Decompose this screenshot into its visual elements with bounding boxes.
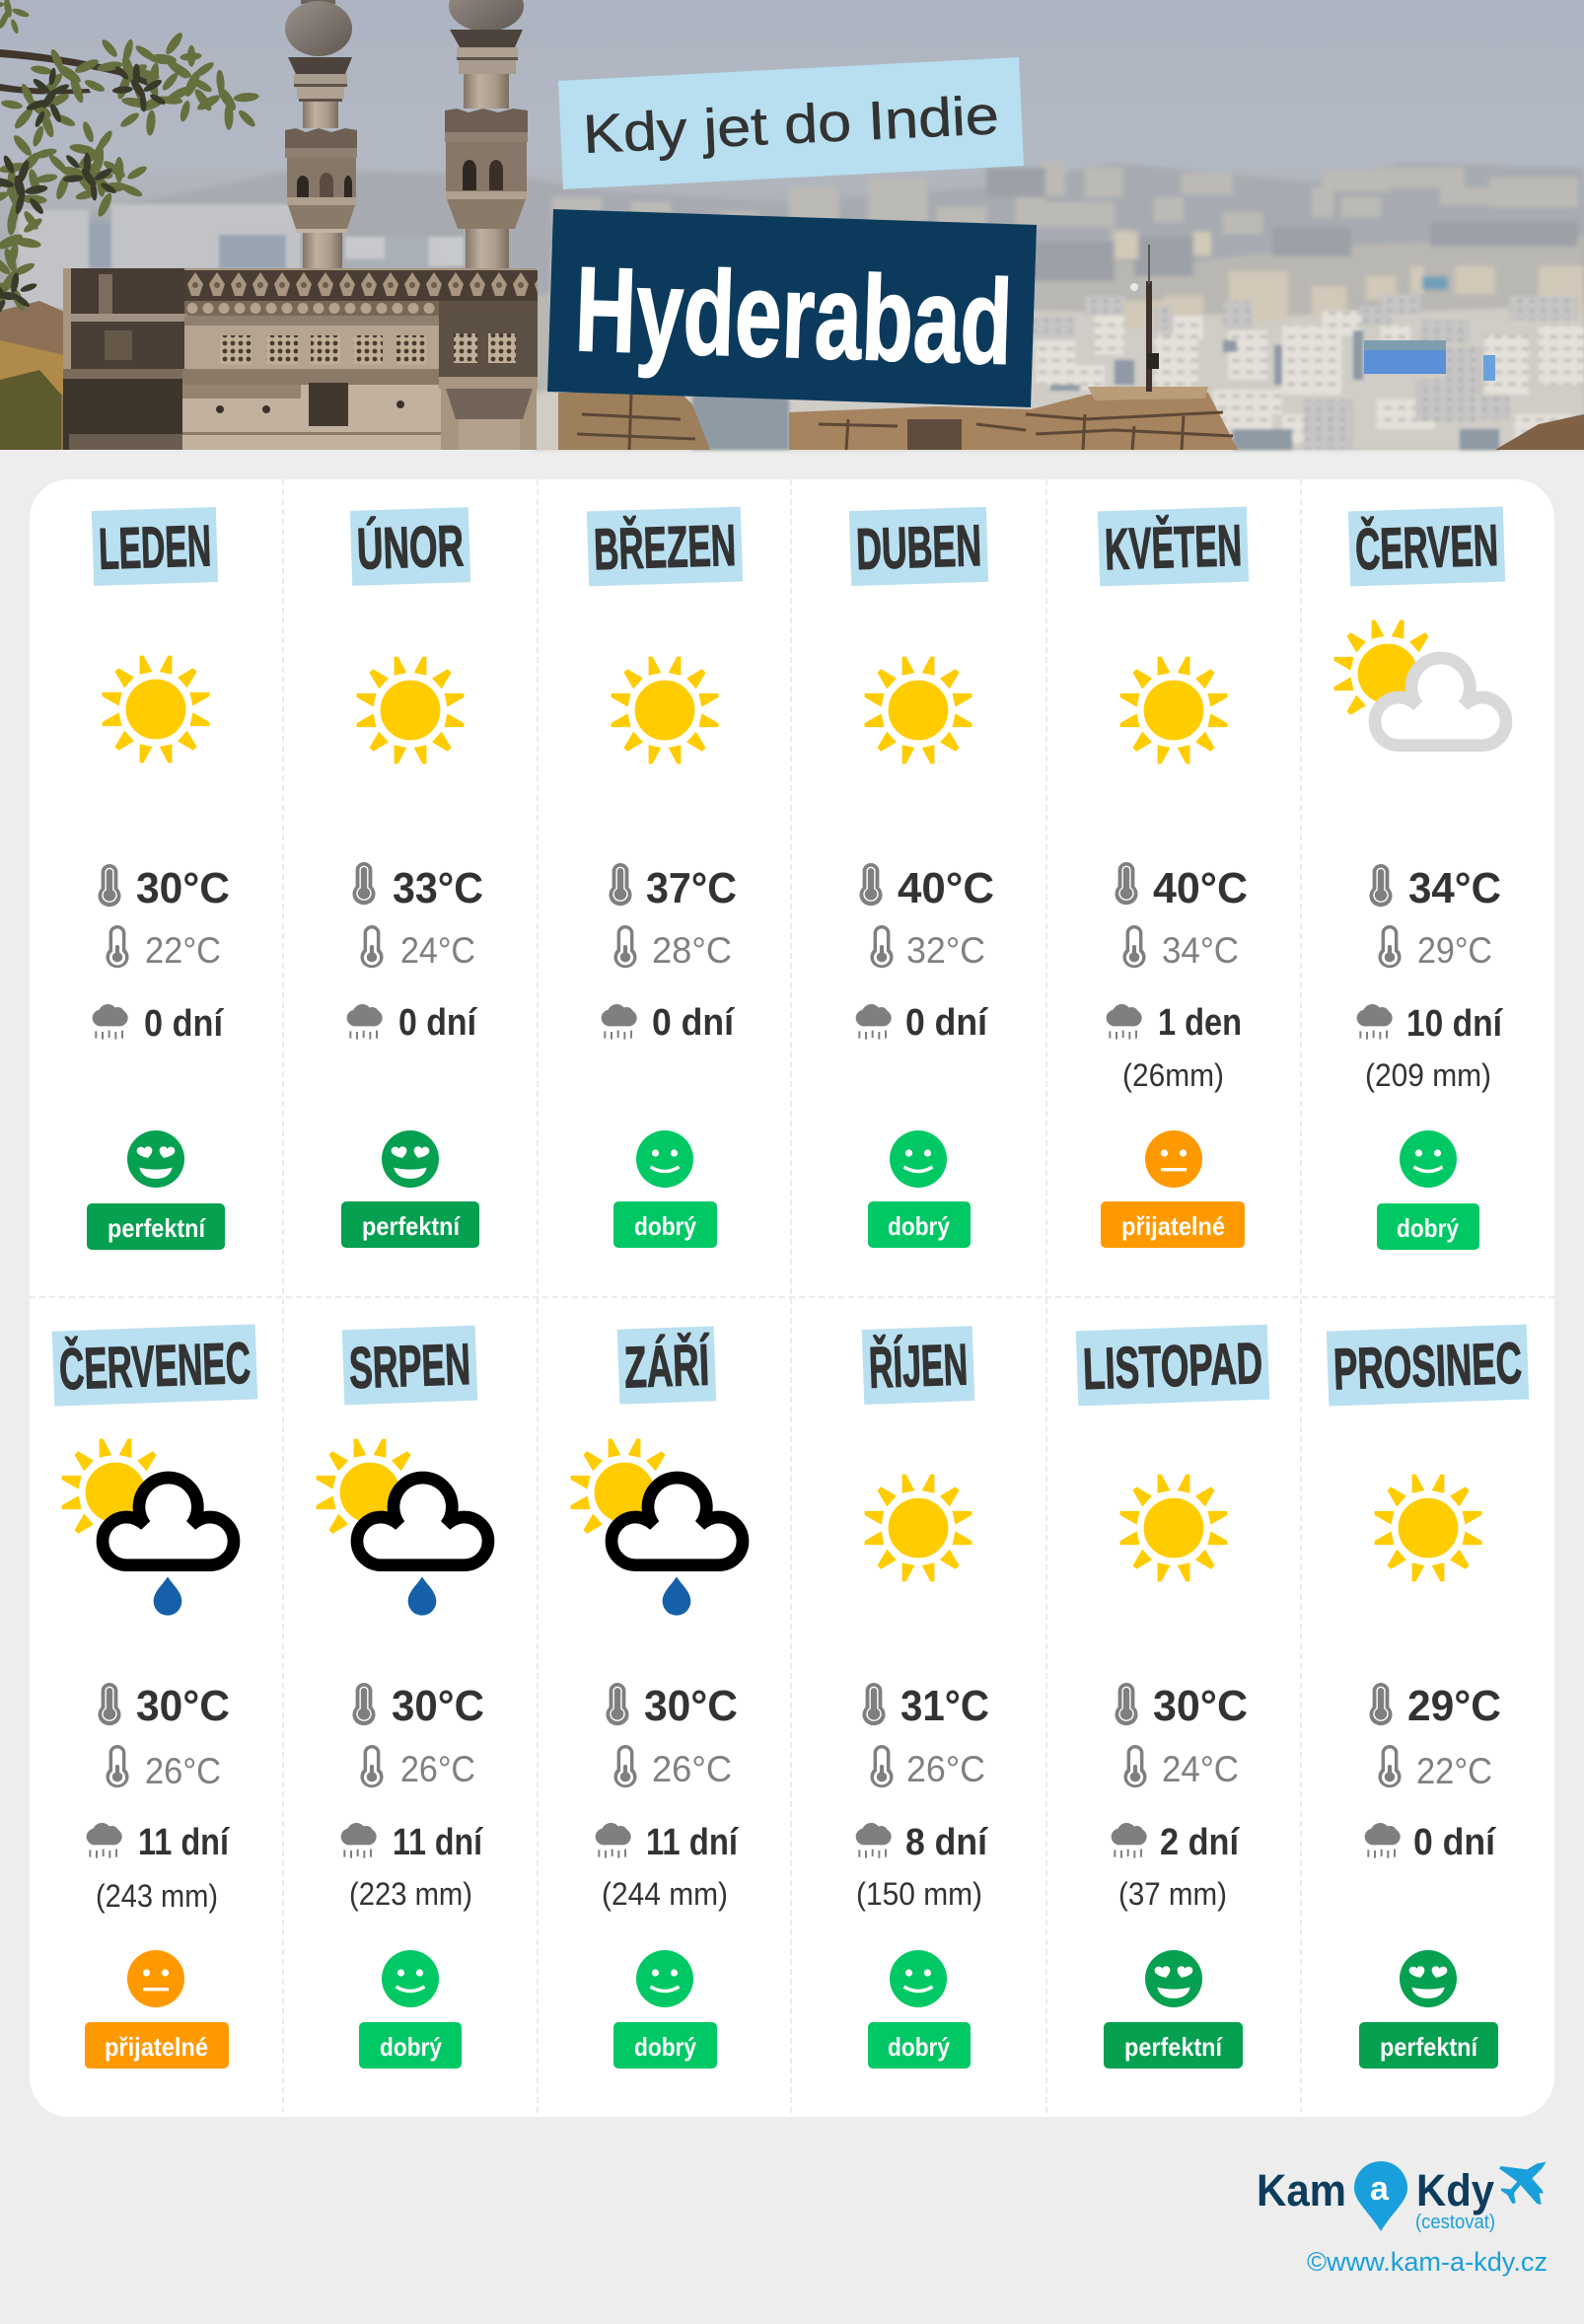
rating badge bbox=[1104, 2022, 1243, 2069]
icon: sun bbox=[103, 656, 209, 763]
month label: SRPEN bbox=[348, 1332, 471, 1401]
foreground city blocks bbox=[572, 294, 1584, 450]
icon: sun bbox=[1375, 1475, 1481, 1581]
min temperature: 26°C bbox=[906, 1749, 985, 1789]
rating badge bbox=[85, 2022, 229, 2069]
palace building bbox=[63, 268, 538, 450]
rain amount: (26mm) bbox=[1122, 1057, 1224, 1093]
icon: thermometer high bbox=[1369, 864, 1393, 907]
logo word Kam: Kam bbox=[1257, 2165, 1346, 2215]
icon: sun, black cloud and drop bbox=[571, 1439, 743, 1616]
smiley bbox=[127, 1130, 184, 1188]
month label: DUBEN bbox=[855, 513, 982, 582]
min temperature: 24°C bbox=[1162, 1749, 1239, 1789]
month label bbox=[1098, 507, 1249, 586]
icon: sun bbox=[1120, 1475, 1227, 1581]
icon: sun, black cloud and drop bbox=[62, 1439, 234, 1616]
month label: LISTOPAD bbox=[1082, 1331, 1263, 1402]
min temperature: 26°C bbox=[652, 1749, 732, 1789]
max temperature: 33°C bbox=[393, 864, 483, 912]
smiley bbox=[1400, 1950, 1457, 2007]
rain days: 0 dní bbox=[144, 1003, 224, 1045]
rain days: 11 dní bbox=[393, 1822, 483, 1863]
max temperature: 40°C bbox=[898, 864, 994, 912]
icon: rain bbox=[596, 1823, 631, 1858]
rating badge bbox=[1359, 2022, 1498, 2069]
cell: ZÁŘÍ bbox=[571, 1326, 743, 2069]
smiley bbox=[636, 1950, 693, 2007]
background high rises bbox=[18, 204, 464, 309]
rating badge bbox=[868, 2022, 971, 2069]
month label: ZÁŘÍ bbox=[623, 1331, 711, 1400]
icon: thermometer high bbox=[862, 1683, 886, 1725]
rain amount: (37 mm) bbox=[1118, 1876, 1227, 1912]
rating badge bbox=[87, 1203, 225, 1250]
title tag: Hyderabad bbox=[547, 209, 1037, 407]
rating badge: perfektní bbox=[362, 1211, 461, 1241]
icon: thermometer high bbox=[606, 1683, 629, 1725]
camera pole bbox=[1130, 245, 1159, 392]
icon: rain bbox=[87, 1823, 122, 1858]
rain days: 11 dní bbox=[646, 1822, 739, 1863]
icon: airplane bbox=[1499, 2162, 1547, 2205]
month label bbox=[849, 507, 988, 586]
max temperature: 31°C bbox=[900, 1682, 989, 1730]
min temperature: 22°C bbox=[1416, 1751, 1492, 1791]
smiley bbox=[636, 1130, 693, 1188]
month label: BŘEZEN bbox=[593, 512, 737, 582]
rating badge bbox=[359, 2022, 462, 2069]
icon: thermometer high bbox=[98, 864, 121, 907]
cell: LISTOPAD bbox=[1076, 1325, 1269, 2069]
min temperature: 26°C bbox=[400, 1749, 475, 1789]
min temperature: 29°C bbox=[1417, 930, 1492, 971]
icon: sun, black cloud and drop bbox=[317, 1439, 488, 1616]
icon: thermometer low bbox=[360, 1745, 384, 1787]
rain days: 2 dní bbox=[1160, 1822, 1240, 1863]
icon: thermometer high bbox=[352, 1683, 376, 1725]
rating badge bbox=[1101, 1201, 1245, 1248]
month label bbox=[862, 1326, 974, 1405]
cell: ČERVEN bbox=[1334, 507, 1506, 1250]
minaret 2 bbox=[445, 0, 528, 270]
rocks bbox=[558, 387, 1584, 450]
icon: rain bbox=[1107, 1004, 1142, 1040]
title tag: Kdy jet do Indie: Kdy jet do Indie bbox=[582, 84, 1000, 165]
rating badge bbox=[613, 1201, 717, 1248]
icon: map pin with letter a: a bbox=[1370, 2170, 1390, 2208]
max temperature: 30°C bbox=[644, 1682, 738, 1730]
smiley bbox=[127, 1950, 184, 2007]
rating badge: perfektní bbox=[108, 1213, 206, 1243]
rating badge: přijatelné bbox=[1121, 1211, 1225, 1241]
min temperature: 34°C bbox=[1162, 930, 1239, 971]
max temperature: 30°C bbox=[1153, 1682, 1248, 1730]
month label: LEDEN bbox=[98, 513, 212, 582]
min temperature: 24°C bbox=[400, 930, 475, 971]
icon: rain bbox=[1365, 1823, 1401, 1858]
rating badge bbox=[1377, 1203, 1479, 1250]
rating badge: dobrý bbox=[888, 1211, 950, 1241]
icon: thermometer low bbox=[1122, 925, 1146, 968]
max temperature: 34°C bbox=[1408, 864, 1501, 912]
icon: rain bbox=[93, 1004, 128, 1040]
icon: rain bbox=[602, 1004, 637, 1040]
max temperature: 40°C bbox=[1153, 864, 1248, 912]
icon: thermometer low bbox=[106, 925, 129, 968]
rating badge: dobrý bbox=[1397, 1213, 1459, 1243]
icon: map pin with letter a bbox=[1354, 2161, 1407, 2231]
month label bbox=[587, 507, 743, 586]
month label: ČERVENEC bbox=[58, 1330, 252, 1402]
left cliff bbox=[0, 301, 69, 450]
icon: sun behind grey cloud bbox=[1334, 620, 1506, 746]
parapet bbox=[184, 270, 538, 302]
title tag: Hyderabad: Hyderabad bbox=[573, 242, 1014, 390]
smiley bbox=[1400, 1130, 1457, 1188]
month label bbox=[92, 507, 218, 586]
min temperature: 22°C bbox=[145, 930, 221, 971]
max temperature: 37°C bbox=[646, 864, 737, 912]
icon: thermometer low bbox=[1378, 1745, 1402, 1787]
smiley bbox=[890, 1950, 947, 2007]
rating badge: dobrý bbox=[634, 2032, 696, 2062]
icon: thermometer low bbox=[1378, 925, 1402, 968]
icon: rain bbox=[1357, 1004, 1393, 1040]
rain amount: (243 mm) bbox=[96, 1878, 218, 1914]
hazy city hillside bbox=[89, 161, 1584, 450]
cell: DUBEN bbox=[849, 507, 994, 1248]
icon: thermometer low bbox=[1123, 1745, 1147, 1787]
rain days: 1 den bbox=[1158, 1002, 1242, 1044]
icon: thermometer high bbox=[1115, 1683, 1138, 1725]
max temperature: 30°C bbox=[392, 1682, 484, 1730]
icon: thermometer low bbox=[613, 1745, 637, 1787]
rain days: 0 dní bbox=[398, 1002, 477, 1044]
icon: thermometer high bbox=[98, 1683, 121, 1725]
rain days: 10 dní bbox=[1406, 1003, 1503, 1045]
min temperature: 32°C bbox=[906, 930, 985, 971]
rain amount: (223 mm) bbox=[349, 1876, 472, 1912]
month label bbox=[350, 507, 470, 586]
icon: sun bbox=[865, 657, 972, 763]
tree branches and leaves bbox=[0, 0, 270, 328]
rain days: 0 dní bbox=[652, 1002, 735, 1044]
month label bbox=[342, 1326, 477, 1405]
max temperature: 30°C bbox=[136, 864, 230, 912]
cell: ŘÍJEN bbox=[856, 1326, 989, 2069]
month label bbox=[617, 1326, 716, 1405]
icon: thermometer high bbox=[1369, 1683, 1393, 1725]
icon: thermometer high bbox=[609, 863, 632, 906]
logo: Kam a Kdy bbox=[1257, 2161, 1548, 2277]
cell: LEDEN bbox=[87, 507, 230, 1250]
rain days: 0 dní bbox=[1413, 1822, 1496, 1863]
title tag: Kdy jet do Indie bbox=[558, 57, 1024, 189]
panels bbox=[184, 316, 439, 326]
icon: thermometer high bbox=[1115, 862, 1138, 905]
month label: KVĚTEN bbox=[1104, 512, 1243, 582]
rating badge: dobrý bbox=[888, 2032, 950, 2062]
rating badge bbox=[613, 2022, 717, 2069]
month label bbox=[1076, 1325, 1269, 1406]
icon: rain bbox=[1112, 1823, 1147, 1858]
blue billboard bbox=[1364, 350, 1446, 374]
logo tagline: (cestovat) bbox=[1415, 2212, 1495, 2233]
tower 2 base bbox=[439, 316, 538, 377]
min temperature: 26°C bbox=[145, 1751, 221, 1791]
website credit: ©www.kam-a-kdy.cz bbox=[1307, 2247, 1548, 2277]
logo word Kdy: Kdy bbox=[1416, 2165, 1494, 2215]
main white panel bbox=[30, 479, 1554, 2117]
icon: thermometer low bbox=[613, 925, 637, 968]
icon: sun bbox=[357, 657, 464, 763]
month label: ŘÍJEN bbox=[868, 1331, 969, 1401]
rating badge: perfektní bbox=[1380, 2032, 1478, 2062]
rain days: 8 dní bbox=[905, 1822, 988, 1863]
icon: thermometer high bbox=[859, 863, 883, 906]
smiley bbox=[382, 1130, 439, 1188]
smiley bbox=[890, 1130, 947, 1188]
cell: BŘEZEN bbox=[587, 507, 743, 1248]
icon: sun bbox=[1120, 657, 1227, 763]
rain amount: (244 mm) bbox=[602, 1876, 728, 1912]
icon: thermometer low bbox=[870, 1745, 894, 1787]
month label bbox=[52, 1324, 257, 1407]
rain days: 11 dní bbox=[138, 1822, 230, 1863]
rating badge: dobrý bbox=[634, 1211, 696, 1241]
hero photo: Hyderabad skyline with minarets bbox=[0, 0, 1584, 450]
rain amount: (209 mm) bbox=[1365, 1057, 1491, 1093]
cell: PROSINEC bbox=[1327, 1324, 1529, 2069]
icon: sun bbox=[612, 657, 718, 763]
icon: sun bbox=[865, 1475, 972, 1581]
rating badge: perfektní bbox=[1124, 2032, 1223, 2062]
rain days: 0 dní bbox=[905, 1002, 988, 1044]
dark left block bbox=[71, 268, 184, 316]
icon: rain bbox=[856, 1823, 892, 1858]
max temperature: 29°C bbox=[1407, 1682, 1501, 1730]
min temperature: 28°C bbox=[652, 930, 732, 971]
month label: ÚNOR bbox=[356, 513, 465, 582]
icon: rain bbox=[341, 1823, 377, 1858]
rating badge bbox=[868, 1201, 971, 1248]
cell: KVĚTEN bbox=[1098, 507, 1249, 1248]
cell: ČERVENEC bbox=[52, 1324, 257, 2069]
cell: SRPEN bbox=[317, 1326, 488, 2069]
rain amount: (150 mm) bbox=[856, 1876, 982, 1912]
smiley bbox=[1145, 1130, 1202, 1188]
rating badge: přijatelné bbox=[105, 2032, 208, 2062]
smiley bbox=[382, 1950, 439, 2007]
rating badge: dobrý bbox=[380, 2032, 442, 2062]
icon: thermometer low bbox=[360, 925, 384, 968]
cell: ÚNOR bbox=[341, 507, 483, 1248]
month label bbox=[1348, 507, 1505, 586]
icon: thermometer high bbox=[352, 862, 376, 905]
icon: rain bbox=[856, 1004, 892, 1040]
smiley bbox=[1145, 1950, 1202, 2007]
rating badge bbox=[341, 1201, 479, 1248]
max temperature: 30°C bbox=[136, 1682, 230, 1730]
minaret 1 bbox=[285, 0, 357, 268]
icon: thermometer low bbox=[106, 1745, 129, 1787]
icon: thermometer low bbox=[870, 925, 894, 968]
icon: rain bbox=[347, 1004, 383, 1040]
